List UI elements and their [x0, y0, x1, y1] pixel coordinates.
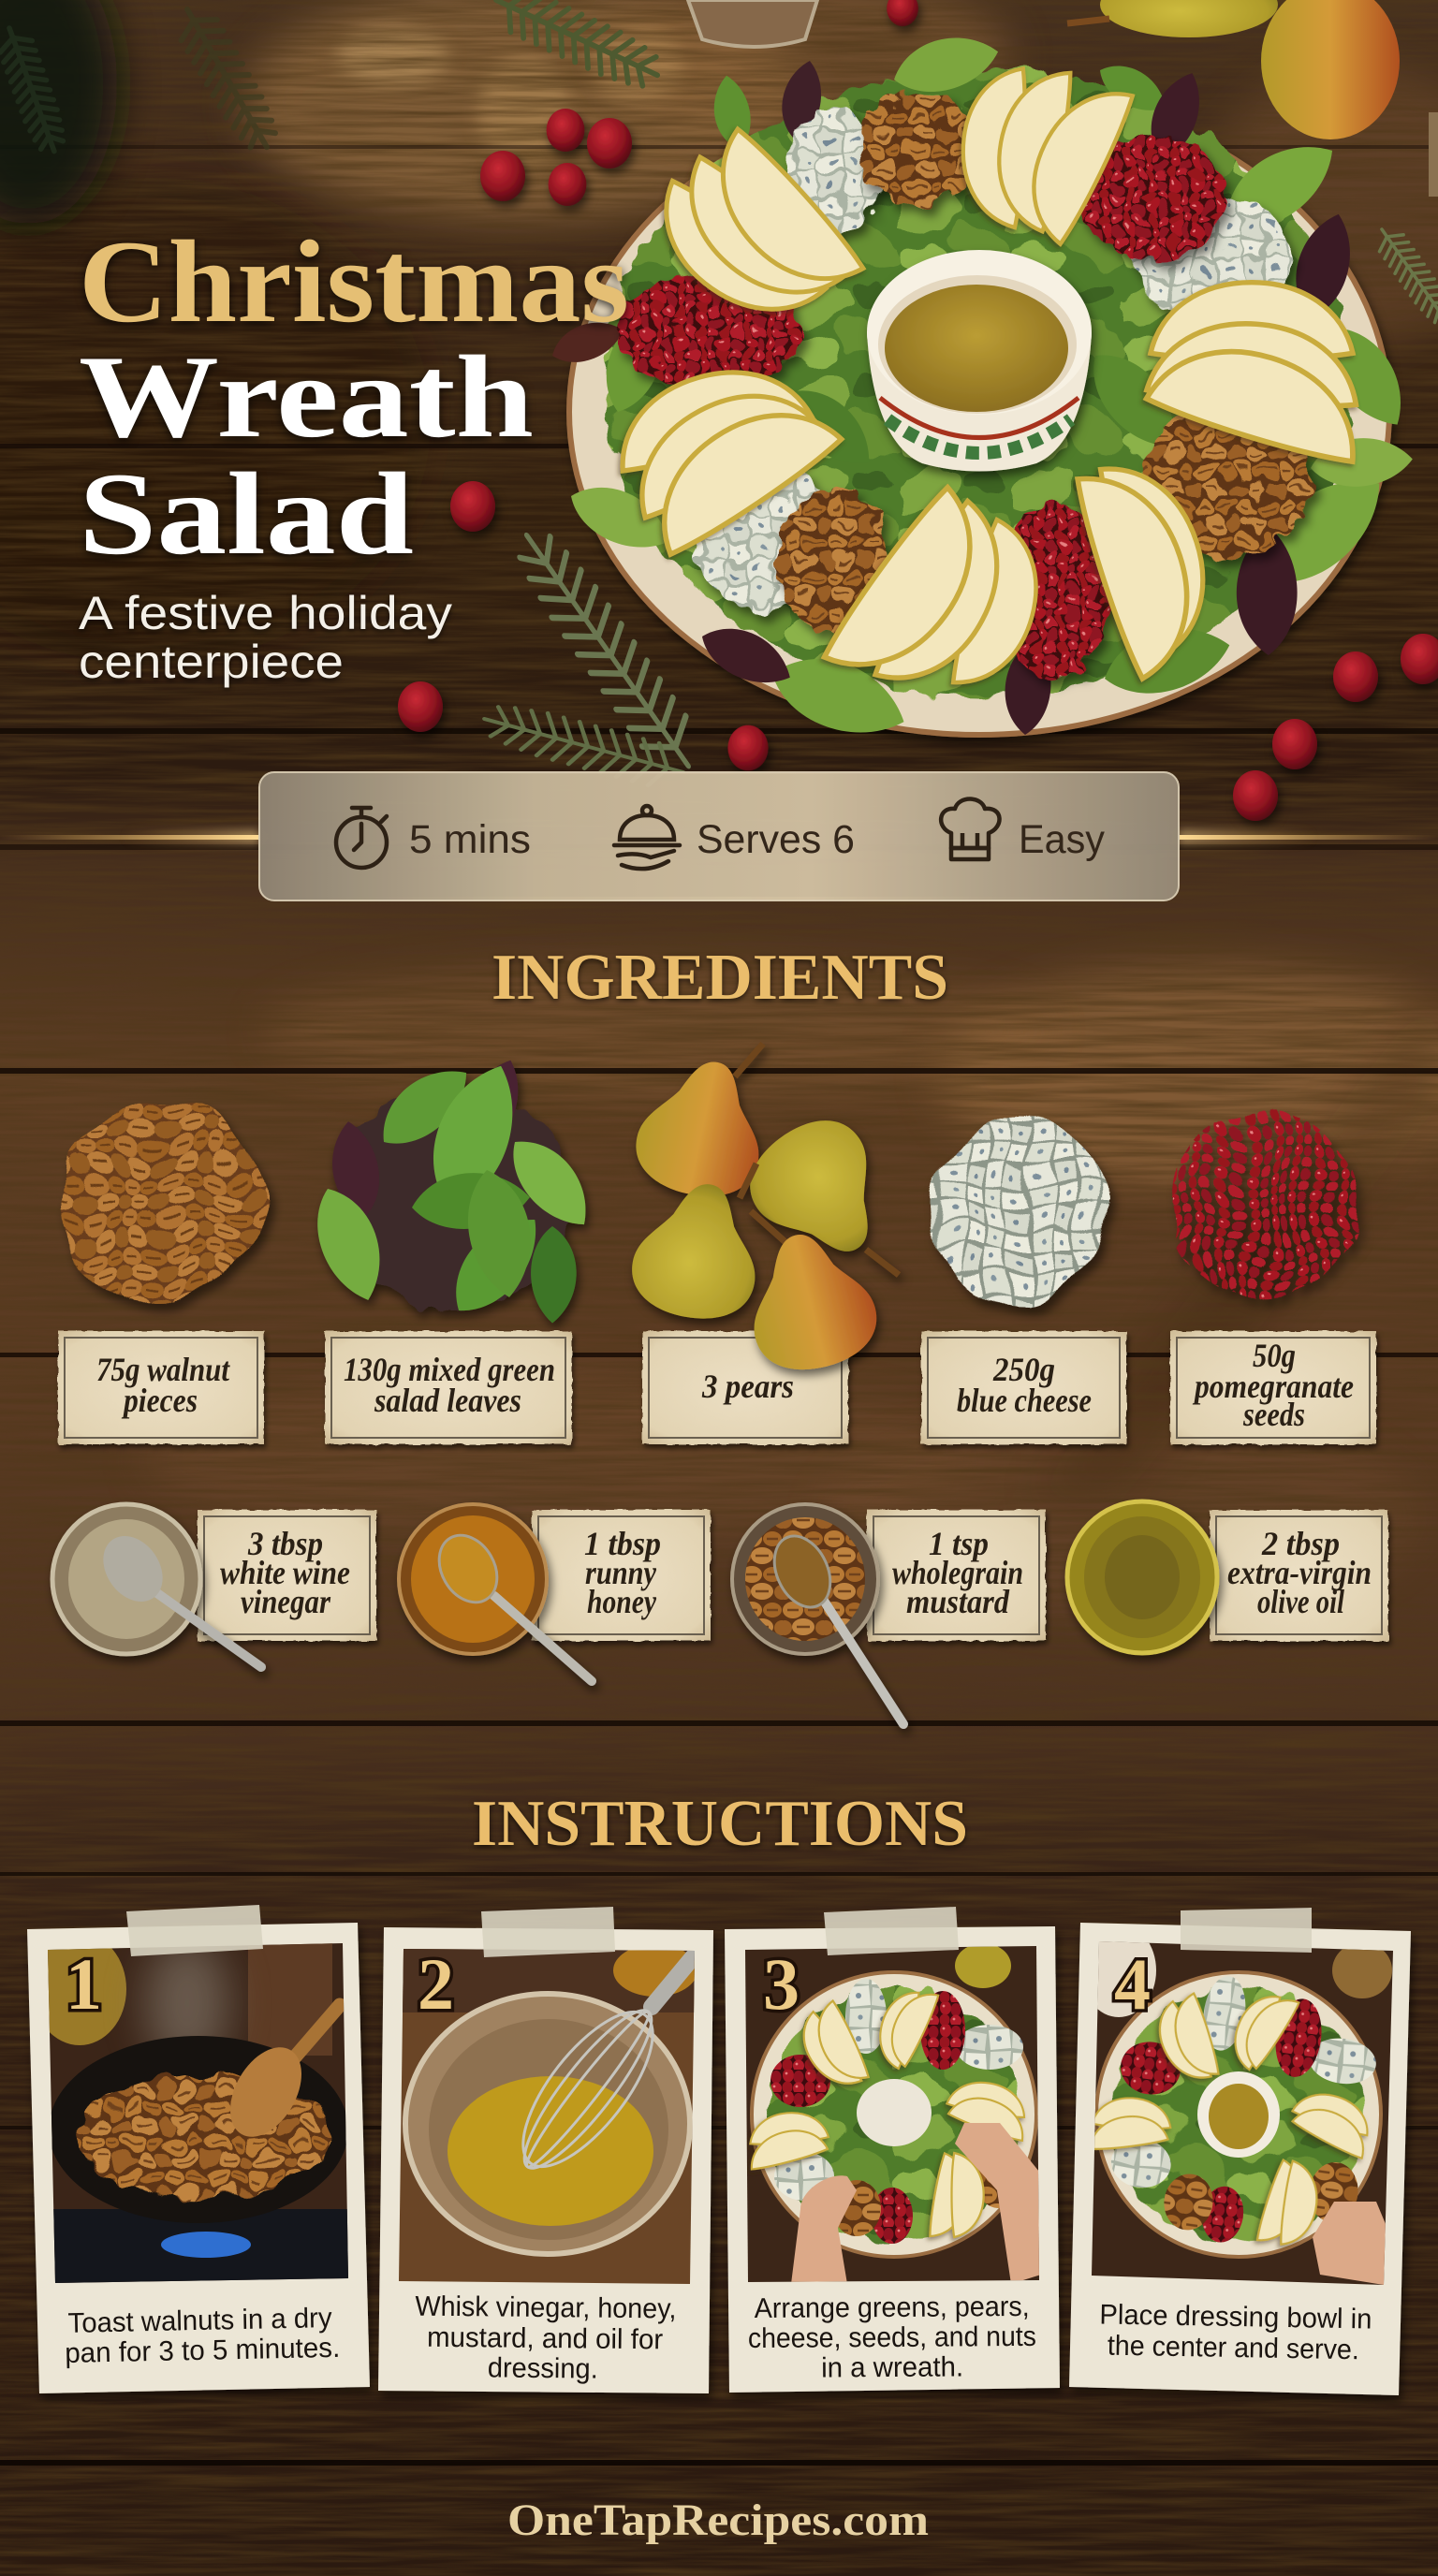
step text: cheese, seeds, and nuts — [748, 2321, 1036, 2354]
label: honey — [532, 1510, 711, 1641]
subtitle: centerpiece — [79, 636, 344, 688]
photo: whisking dressing — [393, 1942, 702, 2289]
step text — [64, 2303, 341, 2369]
label: servings: Serves 6 — [697, 817, 855, 862]
hand — [1313, 2202, 1395, 2285]
step text — [1099, 2299, 1372, 2366]
label: mustard: 1 tsp — [929, 1525, 989, 1562]
photo: finished salad — [1071, 1924, 1400, 2289]
step number: 3 — [763, 1943, 800, 2025]
hands — [791, 2175, 857, 2284]
bowl: honey with spoon — [399, 1504, 592, 1681]
decoration: top right pears and glass — [688, 0, 1438, 197]
pomegranate clusters — [617, 135, 1226, 678]
tape — [126, 1905, 263, 1956]
label: honey: runny — [585, 1554, 657, 1591]
label: greens: salad leaves — [374, 1382, 521, 1419]
dressing bowl — [867, 250, 1092, 472]
wreath salad plate — [546, 26, 1421, 751]
label: time: 5 mins — [409, 817, 531, 862]
label: mustard — [867, 1510, 1046, 1641]
step card 3 — [725, 1907, 1060, 2393]
bowl: mustard with spoon — [732, 1504, 903, 1724]
info pill — [259, 772, 1179, 900]
step text: dressing. — [488, 2352, 598, 2385]
step card 1 — [27, 1905, 370, 2393]
title: Christmas — [79, 217, 629, 347]
label: vinegar: 3 tbsp — [247, 1525, 323, 1562]
label: pomegranate: 50g — [1253, 1337, 1296, 1374]
ingredient: pomegranate seeds — [1172, 1110, 1359, 1297]
title — [79, 217, 629, 579]
ingredient: blue cheese — [930, 1114, 1108, 1301]
footer: website: OneTapRecipes.com — [507, 2496, 929, 2545]
step number: 4 — [1114, 1943, 1151, 2025]
label: walnuts — [58, 1331, 264, 1444]
glow lines — [0, 771, 1438, 901]
label: walnuts: 75g walnut — [96, 1351, 230, 1388]
label: greens — [325, 1331, 572, 1444]
tape — [1181, 1908, 1312, 1953]
step text — [748, 2291, 1036, 2384]
walnut clusters — [775, 90, 1311, 632]
heading: ingredients: INGREDIENTS — [492, 942, 948, 1014]
label: difficulty: Easy — [1019, 817, 1105, 862]
step number: 1 — [66, 1943, 102, 2025]
tape — [824, 1907, 959, 1955]
subtitle — [79, 587, 452, 688]
decoration: foliage top-left — [0, 0, 1438, 329]
step text: Place dressing bowl in — [1099, 2299, 1372, 2335]
title: Wreath — [79, 332, 534, 462]
step text: in a wreath. — [821, 2351, 963, 2384]
photo: toasting walnuts — [48, 1943, 348, 2283]
label: pears: 3 pears — [701, 1368, 794, 1405]
label: vinegar: white wine — [220, 1554, 350, 1591]
label: blue cheese — [921, 1331, 1126, 1444]
label: mustard: wholegrain — [892, 1554, 1023, 1591]
icon: chef hat — [941, 799, 1000, 859]
step text: Toast walnuts in a dry — [67, 2303, 332, 2339]
bowl: vinegar with spoon — [52, 1504, 261, 1667]
pear slices — [604, 63, 1374, 707]
step text: pan for 3 to 5 minutes. — [65, 2333, 341, 2369]
label: olive oil: extra-virgin — [1227, 1554, 1372, 1591]
icon: stopwatch — [336, 808, 387, 868]
label: olive oil: olive oil — [1257, 1583, 1344, 1620]
label: olive oil — [1210, 1510, 1388, 1641]
label: pomegranate: pomegranate — [1192, 1368, 1354, 1405]
ingredient: mixed greens — [303, 1052, 605, 1327]
tape — [481, 1907, 615, 1957]
label: pears — [642, 1331, 848, 1444]
label: blue cheese: blue cheese — [957, 1382, 1092, 1419]
label: olive oil: 2 tbsp — [1261, 1525, 1340, 1562]
decoration: rosemary sprig — [478, 520, 710, 794]
pear overlapping label — [734, 1211, 886, 1382]
label: pomegranate — [1170, 1331, 1376, 1444]
bowl: olive oil — [1067, 1501, 1217, 1653]
step card 4 — [1069, 1908, 1411, 2395]
label: vinegar — [198, 1510, 376, 1641]
plate — [569, 89, 1389, 735]
step text — [415, 2291, 677, 2385]
blue cheese clusters — [693, 110, 1292, 610]
heading: instructions: INSTRUCTIONS — [472, 1788, 968, 1860]
label: honey: honey — [587, 1583, 657, 1620]
step text: Whisk vinegar, honey, — [415, 2291, 677, 2324]
label: vinegar: vinegar — [241, 1583, 331, 1620]
label: pomegranate: seeds — [1242, 1396, 1305, 1433]
step number: 2 — [418, 1943, 454, 2025]
step text: mustard, and oil for — [427, 2322, 663, 2355]
step card 2 — [378, 1907, 713, 2393]
icon: cloche — [614, 806, 680, 869]
step text: Arrange greens, pears, — [755, 2291, 1030, 2324]
label: mustard: mustard — [906, 1583, 1010, 1620]
label: walnuts: pieces — [121, 1382, 198, 1419]
ingredient: pears — [625, 1044, 910, 1327]
ingredient: walnuts — [63, 1102, 259, 1304]
decoration: cranberries — [398, 0, 1438, 821]
label: honey: 1 tbsp — [584, 1525, 661, 1562]
label: blue cheese: 250g — [992, 1351, 1055, 1388]
step text: the center and serve. — [1108, 2331, 1359, 2365]
title: Salad — [79, 449, 414, 579]
photo: arranging wreath — [735, 1938, 1049, 2289]
salad greens ring — [546, 26, 1421, 751]
label: greens: 130g mixed green — [344, 1351, 555, 1388]
subtitle: A festive holiday — [79, 587, 452, 639]
